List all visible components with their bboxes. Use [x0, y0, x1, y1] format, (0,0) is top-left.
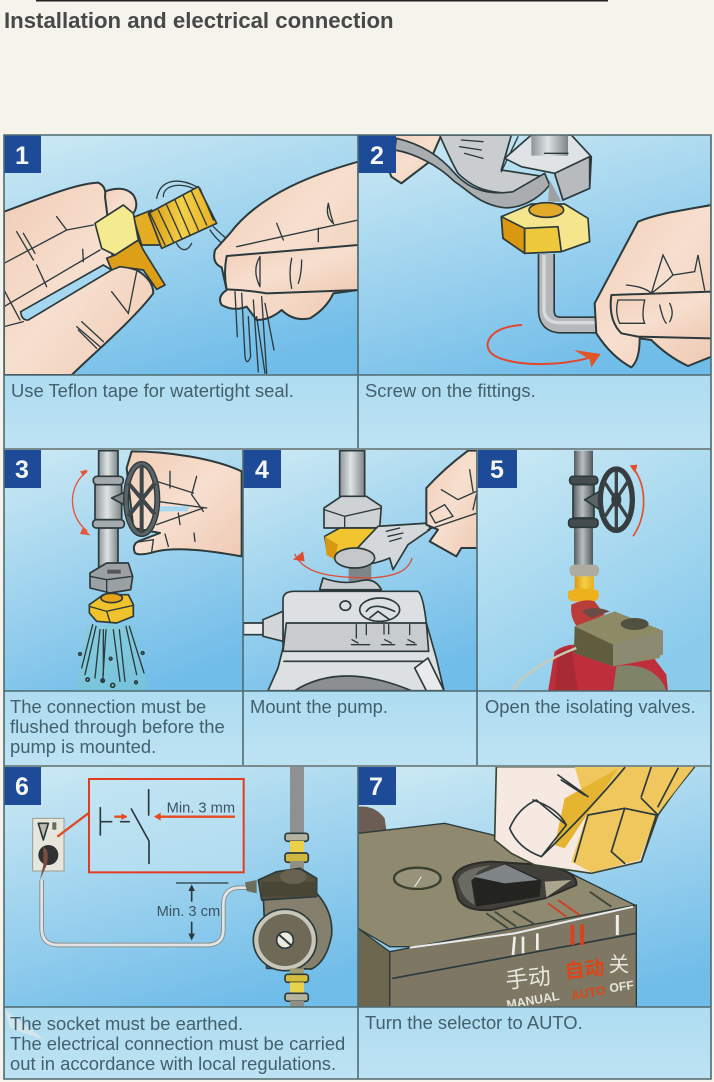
caption 1: Use Teflon tape for watertight seal. [11, 380, 294, 401]
caption 4: Mount the pump. [250, 696, 388, 717]
caption 3: pump is mounted. [10, 736, 156, 757]
illustration: pump selector dial: 关 [609, 954, 629, 977]
step badge 7 [358, 767, 396, 805]
step badge 4 [243, 450, 281, 488]
caption 6: The socket must be earthed. [10, 1013, 243, 1034]
caption 6: The electrical connection must be carried [10, 1033, 345, 1054]
illustration: pump selector dial: AUTO [570, 983, 607, 1003]
illustration: valve, hand and water spray [72, 451, 242, 690]
caption 2: Screw on the fittings. [365, 380, 536, 401]
step badge 3 [4, 450, 41, 488]
illustration: wiring diagram [33, 767, 332, 1008]
caption 6 [4, 1007, 358, 1079]
caption 4 [243, 691, 477, 765]
illustration: hands wrapping thread [4, 162, 358, 375]
step badge 2: 2 [370, 142, 384, 170]
title: Installation and electrical connection [4, 8, 394, 33]
illustration: wrench tightening pump [243, 451, 477, 691]
caption 2 [358, 375, 711, 448]
caption 3: flushed through before the [10, 716, 225, 737]
switch diagram callout: Min. 3 mm [167, 801, 235, 817]
illustration: wrench and elbow fitting [381, 134, 711, 367]
switch diagram callout [89, 779, 244, 872]
panel: step 5 open isolating valves [477, 450, 711, 765]
caption 7: Turn the selector to AUTO. [365, 1012, 583, 1033]
socket [33, 818, 64, 880]
step badge 6: 6 [15, 773, 29, 801]
step badge 7: 7 [369, 773, 383, 801]
panel: step 2 screw on fittings [358, 134, 711, 448]
caption 7 [358, 1007, 711, 1079]
illustration: pump selector dial: 手动 [504, 963, 552, 993]
illustration: pump selector dial: MANUAL [505, 989, 561, 1012]
step badge 4: 4 [255, 456, 269, 484]
pump [245, 868, 332, 1008]
panel: step 7 selector to auto [358, 767, 711, 1079]
illustration: pump selector dial: 自动 [563, 956, 606, 983]
caption 6: out in accordance with local regulations. [10, 1053, 336, 1074]
step badge 5 [478, 450, 517, 488]
panel: step 4 mount the pump [243, 450, 477, 765]
caption 5 [477, 691, 711, 765]
clearance dimension: Min. 3 cm [157, 904, 220, 920]
caption 3: The connection must be [10, 696, 206, 717]
step badge 5: 5 [490, 456, 504, 484]
clearance dimension [157, 883, 228, 940]
caption 5: Open the isolating valves. [485, 696, 696, 717]
illustration: pump selector dial: OFF [608, 978, 635, 995]
step badge 1: 1 [15, 142, 29, 170]
caption 1 [4, 375, 358, 448]
step badge 3: 3 [15, 456, 29, 484]
illustration: pump selector dial [358, 767, 695, 1012]
step badge 1 [4, 135, 41, 173]
caption 3 [4, 691, 243, 765]
step badge 2 [358, 135, 396, 173]
illustration: valve and red pump [512, 451, 668, 691]
step badge 6 [4, 767, 41, 805]
panel: step 6 electrical connection [4, 767, 358, 1079]
panel: step 3 flush connection [4, 450, 243, 765]
panel: step 1 teflon tape [4, 135, 358, 448]
